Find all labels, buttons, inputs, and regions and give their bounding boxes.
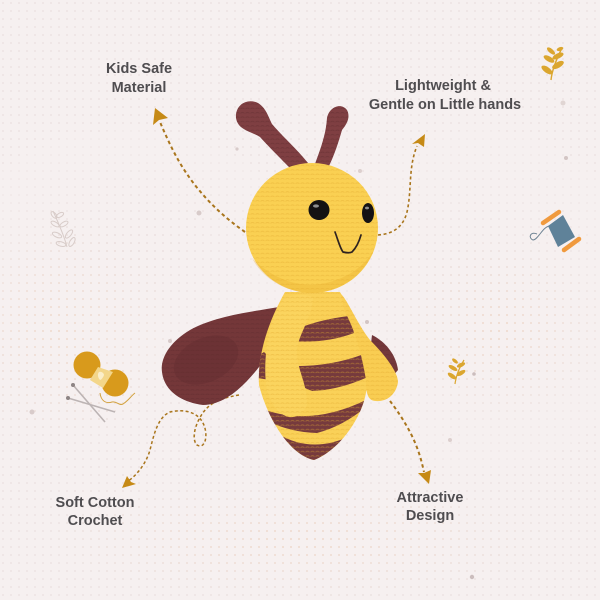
left eye bbox=[308, 200, 330, 220]
label: attractive design: Design bbox=[406, 508, 454, 524]
label: kids safe material: Material bbox=[112, 80, 166, 96]
label: lightweight: Gentle on Little hands bbox=[369, 97, 521, 113]
arrow: kids safe material bbox=[153, 108, 245, 232]
stripes bbox=[258, 316, 366, 460]
label: soft cotton crochet: Crochet bbox=[68, 513, 123, 529]
bee toy bbox=[162, 101, 398, 470]
arrow: lightweight bbox=[378, 134, 425, 235]
icon: outline leaf sprig bbox=[50, 211, 76, 247]
left antenna bbox=[236, 101, 308, 170]
right eye bbox=[362, 203, 374, 223]
label: lightweight: Lightweight & bbox=[395, 78, 491, 94]
head bbox=[246, 163, 378, 293]
near wing bbox=[162, 307, 285, 405]
arrow: soft cotton crochet bbox=[122, 395, 239, 488]
label: kids safe material: Kids Safe bbox=[106, 61, 172, 77]
right arm bbox=[340, 293, 398, 401]
smile bbox=[335, 232, 361, 253]
body bbox=[258, 292, 366, 460]
icon: top leaf sprig bbox=[540, 46, 565, 80]
left arm bbox=[265, 295, 313, 417]
label: attractive design: Attractive bbox=[397, 490, 463, 506]
icon: yarn and needles bbox=[66, 352, 135, 422]
label: soft cotton crochet: Soft Cotton bbox=[56, 495, 134, 511]
icon: small leaf sprig bbox=[447, 357, 466, 384]
arrow: attractive design bbox=[390, 401, 431, 484]
icon: thread spool bbox=[530, 212, 579, 250]
far wing bbox=[368, 335, 398, 385]
right antenna bbox=[315, 106, 348, 168]
